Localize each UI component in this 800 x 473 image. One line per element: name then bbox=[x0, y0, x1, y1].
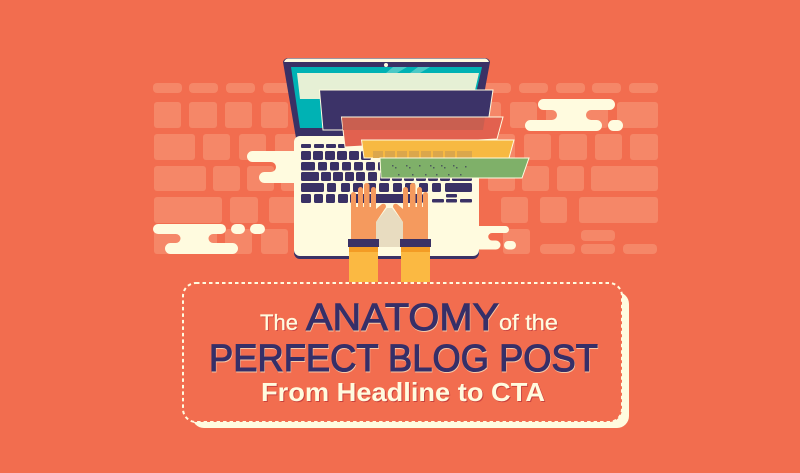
subtitle: From Headline to CTA bbox=[262, 378, 546, 408]
cloud: top right bbox=[525, 99, 623, 131]
background keyboard pattern bbox=[153, 83, 658, 254]
title line 1: of the: of the bbox=[499, 310, 558, 335]
title line 2: PERFECT BLOG POST bbox=[209, 338, 598, 380]
title text bbox=[209, 297, 598, 408]
cloud: middle left bbox=[247, 151, 300, 183]
keyboard keys bbox=[301, 144, 472, 203]
box panel bbox=[183, 283, 622, 422]
box offset shadow bbox=[192, 292, 629, 428]
blog layer: yellow panel bbox=[362, 140, 514, 158]
title line 1: ANATOMY: ANATOMY bbox=[306, 297, 499, 339]
blog layer: navy panel bbox=[320, 90, 493, 130]
right hand bbox=[393, 183, 428, 240]
left hand bbox=[351, 183, 386, 240]
title line 2: PERFECT BLOG POST bbox=[210, 339, 598, 381]
title line 1: The: The bbox=[261, 311, 299, 336]
laptop screen bbox=[283, 58, 490, 138]
blog layer: red panel bbox=[342, 117, 503, 147]
subtitle: From Headline to CTA bbox=[261, 377, 545, 407]
title line 1: ANATOMY: ANATOMY bbox=[306, 298, 500, 340]
laptop bbox=[283, 58, 490, 282]
cloud: bottom right bbox=[470, 226, 516, 250]
right sleeve bbox=[400, 239, 431, 282]
blog layer: green panel bbox=[380, 158, 529, 178]
laptop base bbox=[294, 136, 479, 259]
title line 1: The: The bbox=[260, 310, 298, 335]
title line 1: of the: of the bbox=[500, 311, 559, 336]
cloud: bottom left bbox=[153, 224, 265, 254]
left sleeve bbox=[348, 239, 379, 282]
title box bbox=[183, 283, 629, 428]
hand shadow bbox=[376, 208, 403, 247]
